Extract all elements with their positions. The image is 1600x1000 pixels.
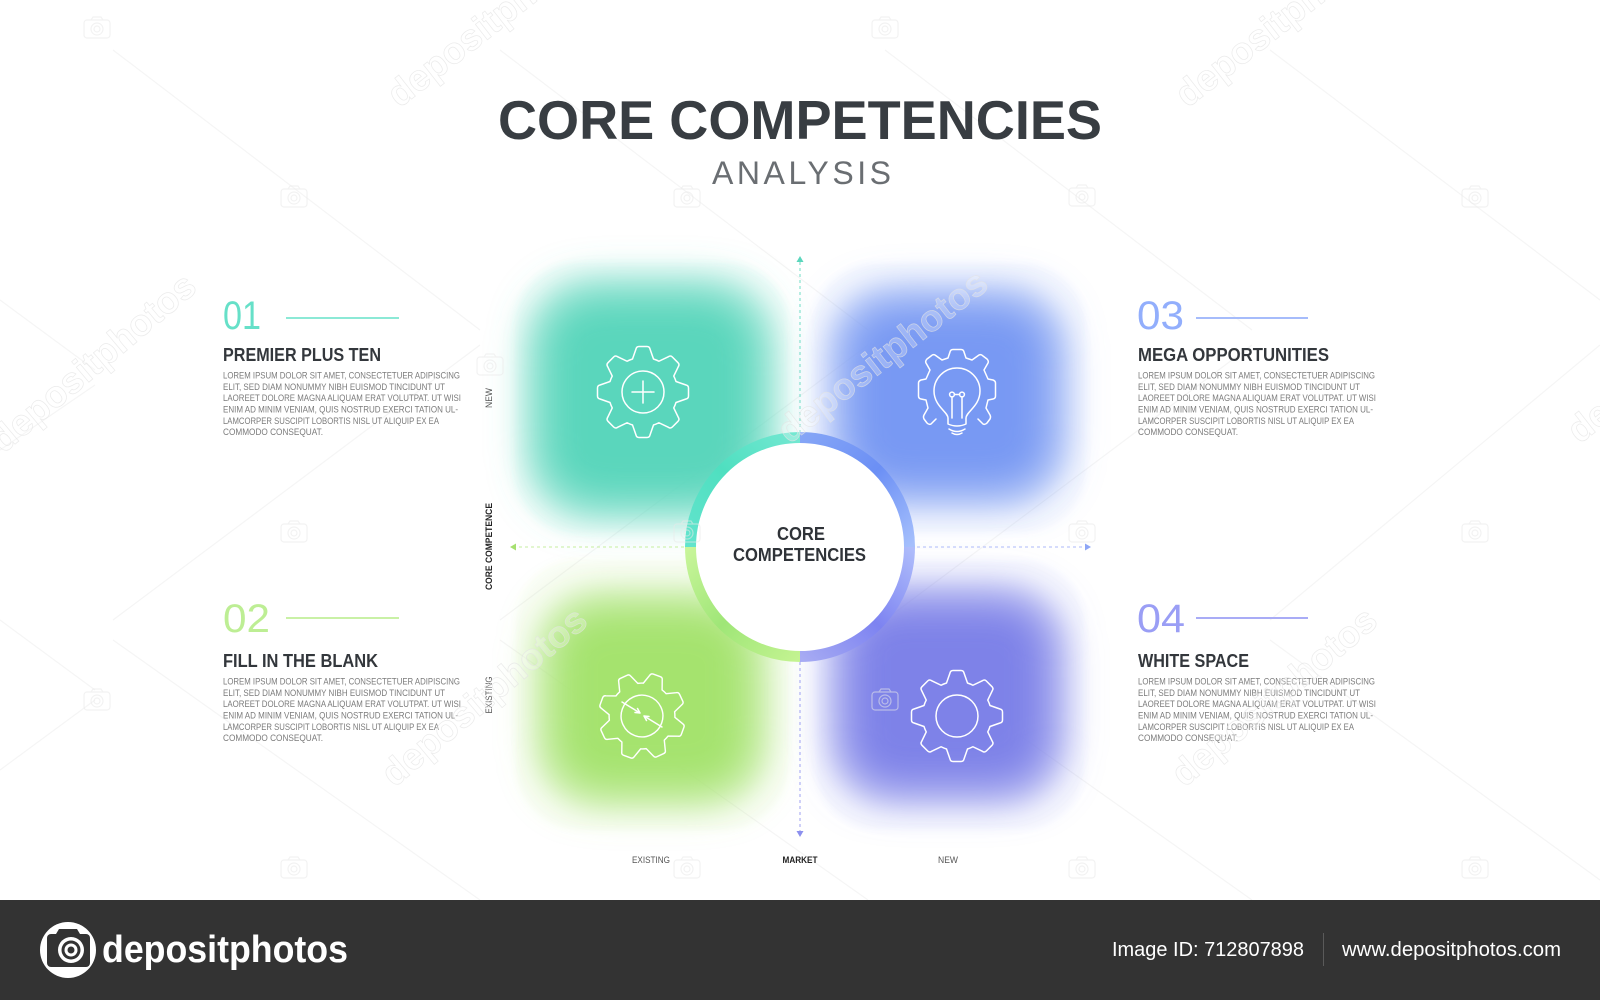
panel: 03 mega opportunities: LAMCORPER SUSCIPIT LOBORTIS NISL UT ALIQUIP EX EA — [1138, 416, 1355, 426]
vertical axis down arrow — [796, 662, 804, 837]
y axis labels: CORE COMPETENCE — [484, 503, 495, 590]
panel: 02 fill in the blank: LOREM IPSUM DOLOR SIT AMET, CONSECTETUER ADIPISCING — [223, 676, 460, 686]
panel: 04 white space: LOREM IPSUM DOLOR SIT AMET, CONSECTETUER ADIPISCING — [1138, 676, 1375, 686]
panel: 04 white space: COMMODO CONSEQUAT. — [1138, 733, 1238, 743]
y axis labels: EXISTING — [484, 676, 495, 714]
x axis labels: NEW — [938, 855, 958, 866]
panel: 04 white space — [1137, 597, 1376, 743]
footer logo: depositphotos — [102, 929, 348, 971]
central ring — [690, 437, 910, 657]
panel: 03 mega opportunities: ENIM AD MINIM VENIAM, QUIS NOSTRUD EXERCI TATION UL- — [1138, 404, 1373, 414]
panel: 02 fill in the blank: LAMCORPER SUSCIPIT LOBORTIS NISL UT ALIQUIP EX EA — [223, 722, 440, 732]
panel: 02 fill in the blank: LAOREET DOLORE MAGNA ALIQUAM ERAT VOLUTPAT. UT WISI — [223, 699, 461, 709]
footer logo — [40, 922, 348, 978]
central label second line: COMPETENCIES — [733, 545, 866, 565]
icon: gear with light bulb — [918, 350, 996, 434]
panel: 01 premier plus ten: LOREM IPSUM DOLOR SIT AMET, CONSECTETUER ADIPISCING — [223, 370, 460, 380]
central label: CORE — [777, 524, 825, 544]
footer url: www.depositphotos.com — [1341, 939, 1561, 961]
blob: bottom right purple — [816, 560, 1084, 830]
panel: 03 mega opportunities: LOREM IPSUM DOLOR SIT AMET, CONSECTETUER ADIPISCING — [1138, 370, 1375, 380]
panel: 04 white space: ENIM AD MINIM VENIAM, QUIS NOSTRUD EXERCI TATION UL- — [1138, 710, 1373, 720]
panel: 03 mega opportunities — [1137, 294, 1376, 437]
panel: 01 premier plus ten: PREMIER PLUS TEN — [223, 345, 381, 365]
panel: 02 fill in the blank: COMMODO CONSEQUAT. — [223, 733, 323, 743]
blob: top right blue — [813, 263, 1086, 533]
vertical axis up arrow — [796, 256, 804, 432]
panel: 01 premier plus ten — [223, 294, 461, 437]
panel: 04 white space: LAMCORPER SUSCIPIT LOBORTIS NISL UT ALIQUIP EX EA — [1138, 722, 1355, 732]
y axis labels: NEW — [484, 388, 495, 408]
y axis labels — [481, 388, 496, 714]
subtitle: ANALYSIS — [712, 155, 891, 191]
x axis labels — [632, 855, 958, 866]
horizontal axis right arrow — [917, 544, 1091, 550]
panel: 04 white space: 04 — [1137, 597, 1185, 641]
title: CORE COMPETENCIES — [498, 89, 1102, 151]
blob: bottom left green — [516, 560, 788, 830]
watermark text: depositphotos — [373, 599, 595, 794]
watermark text: depositphotos — [769, 261, 995, 451]
panel: 01 premier plus ten: 01 — [223, 294, 261, 338]
panel: 02 fill in the blank: FILL IN THE BLANK — [223, 651, 378, 671]
panel: 02 fill in the blank — [223, 597, 461, 743]
icon: plain gear — [912, 670, 1002, 762]
panel: 01 premier plus ten: LAMCORPER SUSCIPIT LOBORTIS NISL UT ALIQUIP EX EA — [223, 416, 440, 426]
panel: 02 fill in the blank: ELIT, SED DIAM NONUMMY NIBH EUISMOD TINCIDUNT UT — [223, 688, 445, 698]
panel: 04 white space: ELIT, SED DIAM NONUMMY NIBH EUISMOD TINCIDUNT UT — [1138, 688, 1360, 698]
watermark text: depositphotos — [1163, 599, 1385, 794]
footer image id: Image ID: 712807898 — [1112, 939, 1304, 961]
panel: 03 mega opportunities: ELIT, SED DIAM NONUMMY NIBH EUISMOD TINCIDUNT UT — [1138, 382, 1360, 392]
panel: 03 mega opportunities: COMMODO CONSEQUAT. — [1138, 427, 1238, 437]
x axis labels: MARKET — [782, 855, 818, 866]
horizontal axis left arrow — [510, 544, 684, 550]
panel: 01 premier plus ten: LAOREET DOLORE MAGNA ALIQUAM ERAT VOLUTPAT. UT WISI — [223, 393, 461, 403]
panel: 03 mega opportunities: MEGA OPPORTUNITIES — [1138, 345, 1329, 365]
panel: 01 premier plus ten: COMMODO CONSEQUAT. — [223, 427, 323, 437]
footer bar — [0, 900, 1600, 1000]
panel: 01 premier plus ten: ENIM AD MINIM VENIAM, QUIS NOSTRUD EXERCI TATION UL- — [223, 404, 458, 414]
panel: 02 fill in the blank: ENIM AD MINIM VENIAM, QUIS NOSTRUD EXERCI TATION UL- — [223, 710, 458, 720]
panel: 01 premier plus ten: ELIT, SED DIAM NONUMMY NIBH EUISMOD TINCIDUNT UT — [223, 382, 445, 392]
watermark text — [0, 0, 1600, 794]
icon: gear with plus — [598, 346, 688, 438]
panel: 03 mega opportunities: 03 — [1137, 294, 1184, 338]
icon: gear with inward arrows — [587, 661, 697, 771]
panel: 04 white space: LAOREET DOLORE MAGNA ALIQUAM ERAT VOLUTPAT. UT WISI — [1138, 699, 1376, 709]
x axis labels: EXISTING — [632, 855, 670, 866]
panel: 03 mega opportunities: LAOREET DOLORE MAGNA ALIQUAM ERAT VOLUTPAT. UT WISI — [1138, 393, 1376, 403]
blob: top left teal — [515, 263, 788, 533]
panel: 02 fill in the blank: 02 — [223, 597, 270, 641]
panel: 04 white space: WHITE SPACE — [1138, 651, 1249, 671]
